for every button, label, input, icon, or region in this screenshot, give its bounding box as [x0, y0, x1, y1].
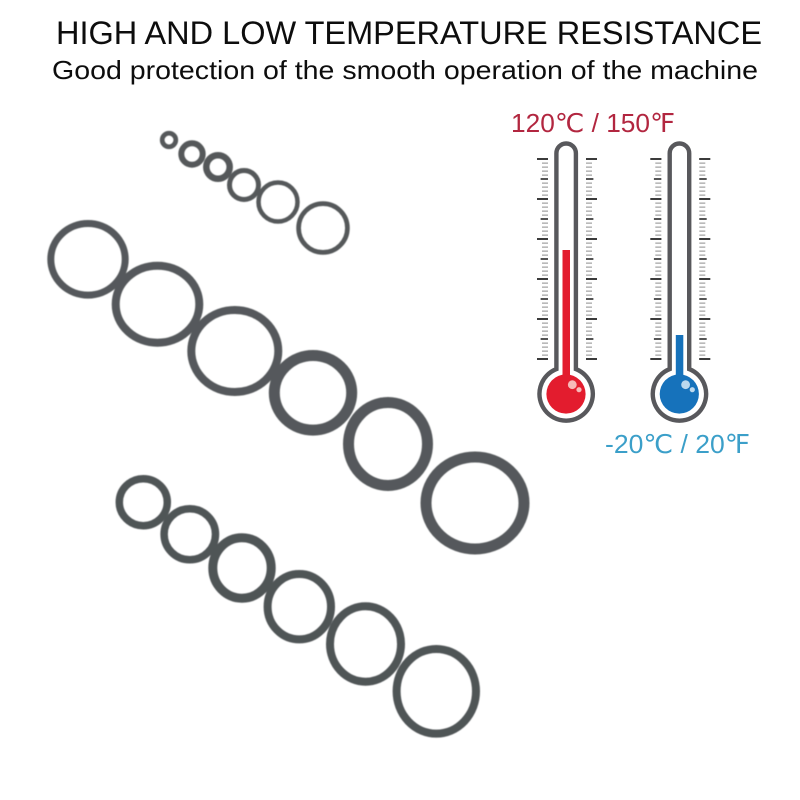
thermometer: cold	[653, 144, 706, 421]
tube and bulb: cold	[653, 144, 706, 421]
o-rings: bottom row	[119, 479, 476, 734]
thermometer: hot	[539, 144, 593, 421]
low temperature label: -20℃ / 20℉	[605, 429, 750, 459]
title: HIGH AND LOW TEMPERATURE RESISTANCE	[56, 15, 762, 51]
ticks: cold right	[702, 158, 705, 360]
high temperature label: 120℃ / 150℉	[511, 108, 675, 138]
o-rings: large middle row	[51, 223, 524, 549]
ticks: hot right	[589, 158, 592, 360]
subtitle: Good protection of the smooth operation of the machine	[52, 55, 758, 85]
tube and bulb: hot	[539, 144, 593, 421]
bubbles: hot	[568, 380, 582, 392]
o-rings: smallest row	[162, 133, 347, 252]
bubbles: cold	[681, 380, 695, 392]
ticks: cold left	[656, 158, 658, 360]
mercury: hot	[546, 250, 586, 414]
ticks: hot left	[542, 158, 545, 360]
mercury: cold	[660, 335, 699, 414]
